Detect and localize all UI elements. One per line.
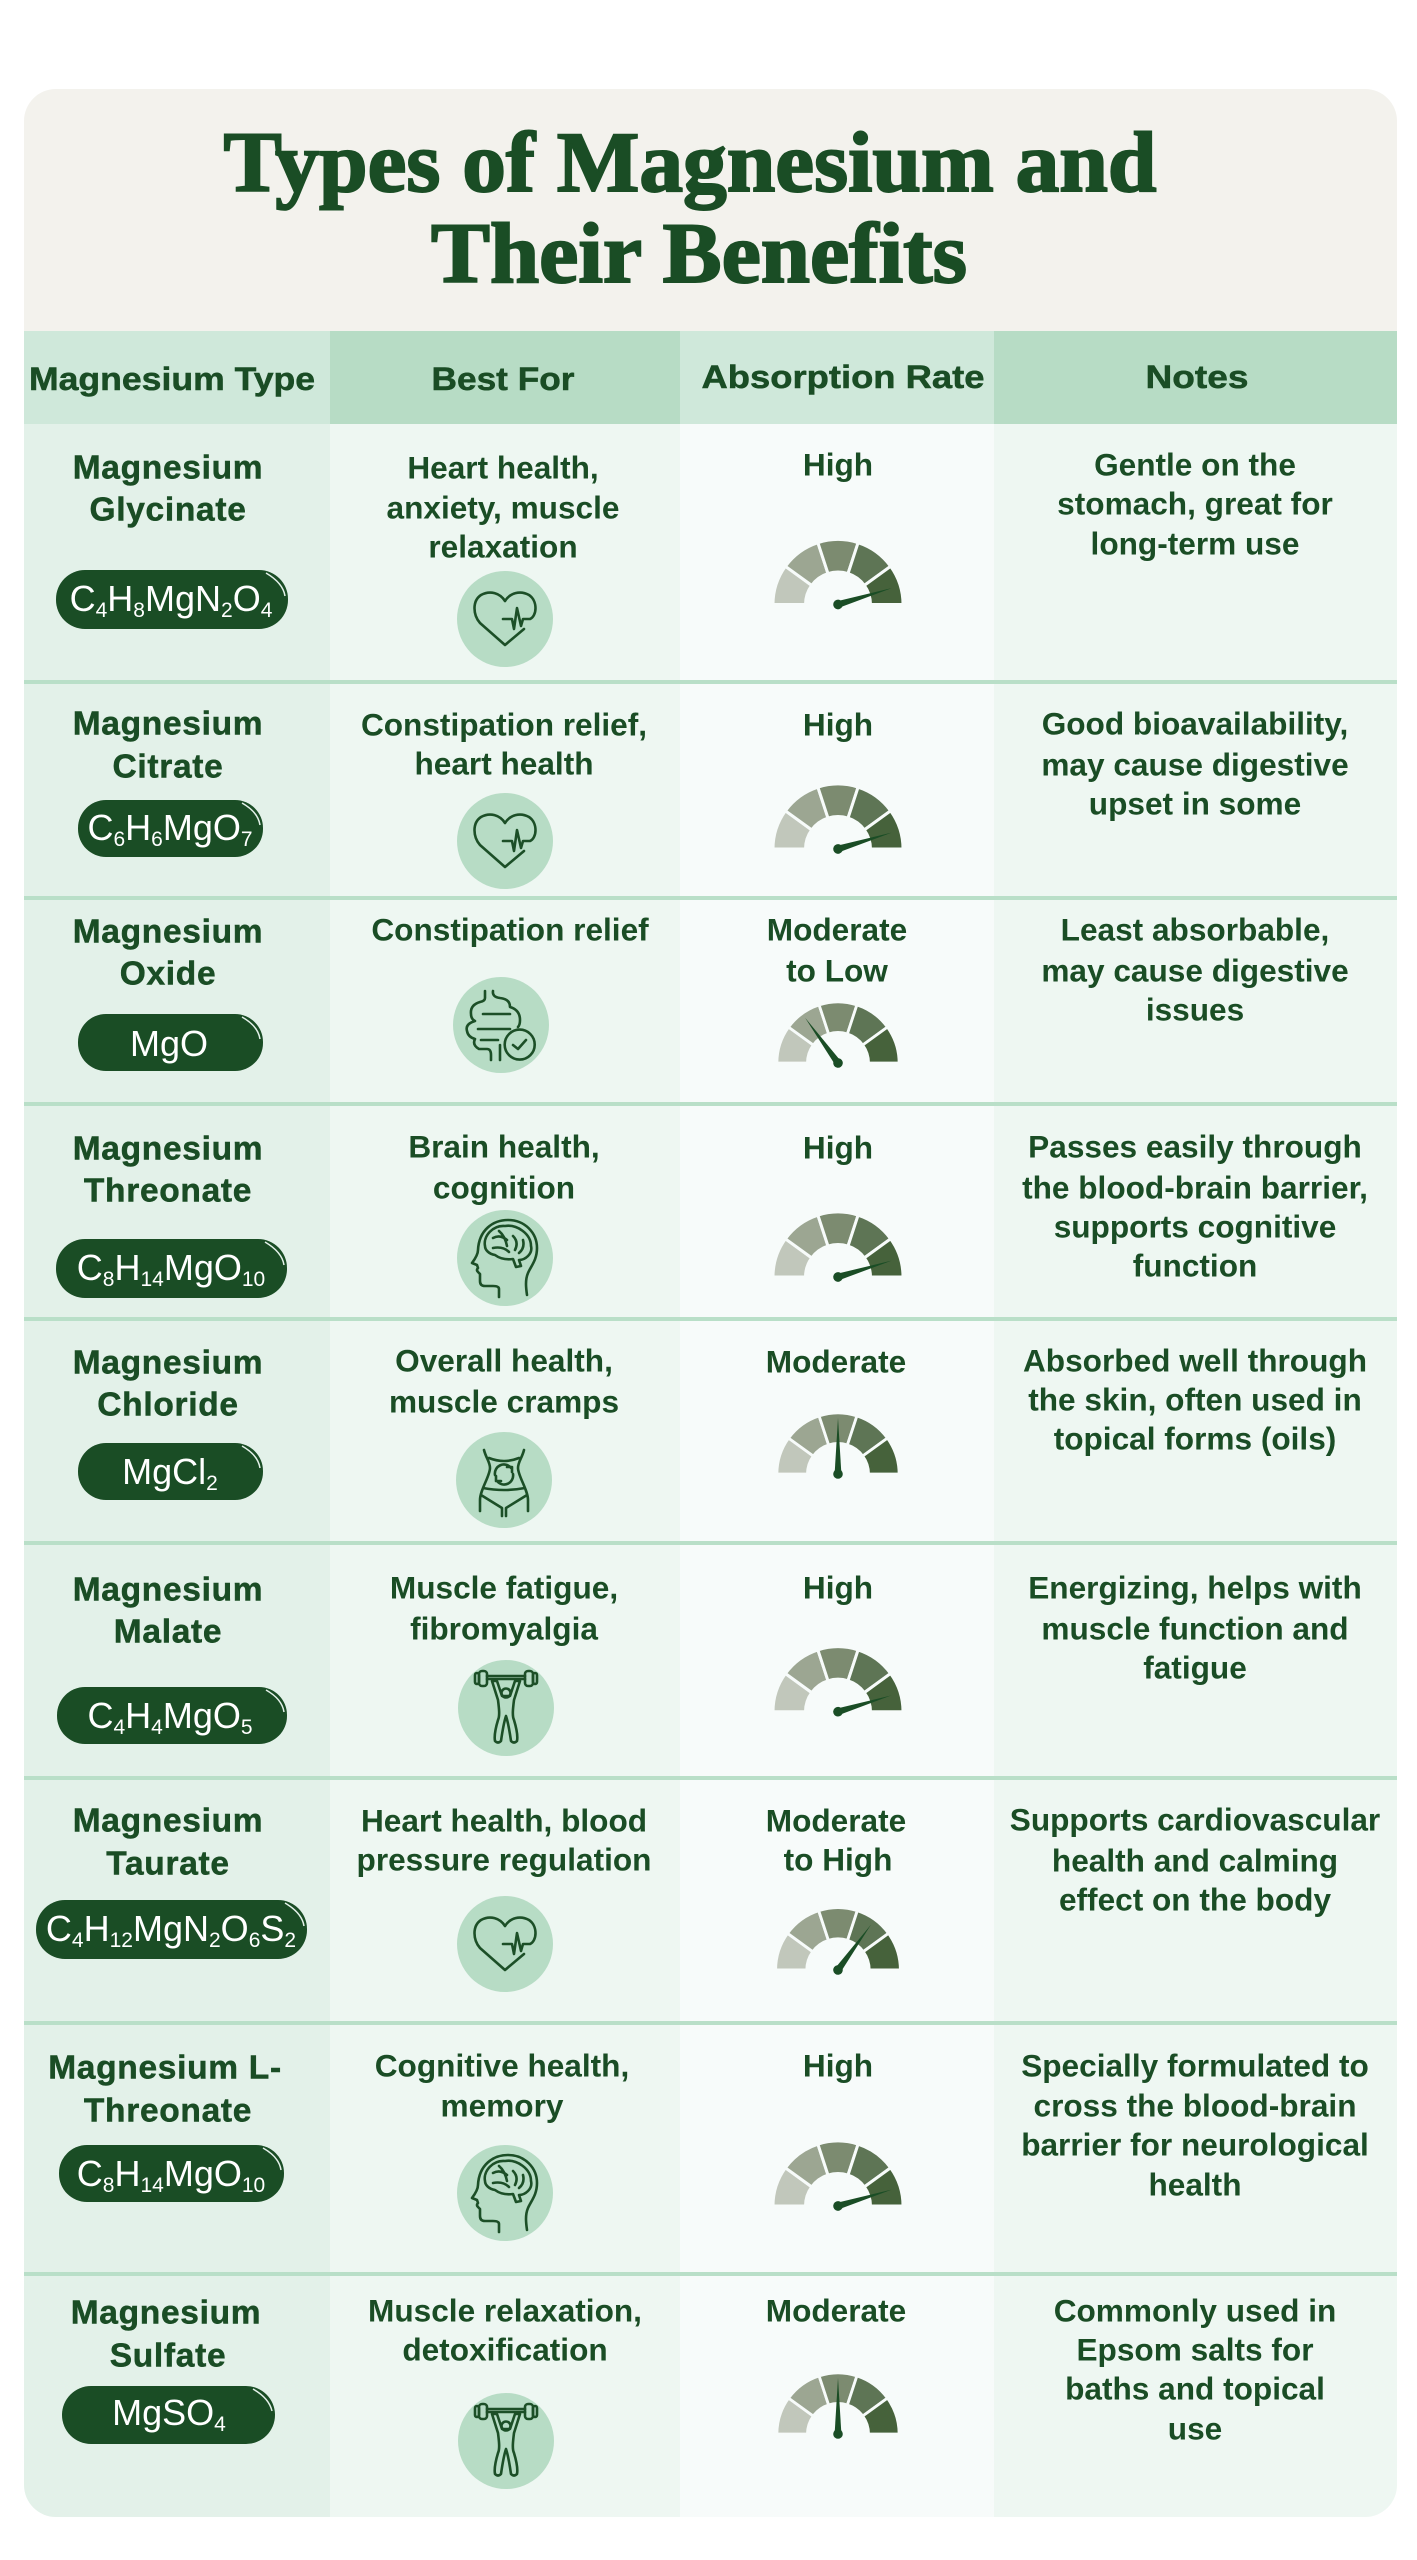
header: Absorption Rate: Absorption Rate	[702, 359, 984, 395]
absorption rate: Moderate	[766, 2292, 906, 2328]
formula pill: MgO	[164, 1247, 242, 1288]
type name: Magnesium L-	[48, 2050, 282, 2086]
icon: intestines	[453, 977, 549, 1073]
formula pill: 2	[221, 599, 233, 622]
notes: Supports cardiovascular	[1010, 1802, 1380, 1838]
formula pill: MgO	[164, 2153, 242, 2194]
formula pill: 4	[72, 1929, 84, 1952]
notes: stomach, great for	[1057, 486, 1333, 522]
formula pill: 8	[103, 1268, 114, 1291]
absorption rate: Moderate	[766, 1344, 906, 1380]
formula pill: 14	[140, 1268, 164, 1291]
formula pill: 14	[140, 2174, 164, 2197]
title: Their Benefits	[431, 205, 967, 301]
icon: brain in head	[457, 2145, 553, 2241]
row: Magnesium Malate	[57, 1570, 1362, 1756]
gauge: moderate to low	[777, 1002, 899, 1070]
notes: the skin, often used in	[1028, 1382, 1362, 1418]
formula pill: MgO	[130, 1023, 208, 1064]
type name: Magnesium	[73, 706, 263, 742]
formula pill: 2	[206, 1472, 218, 1495]
formula pill: 2	[209, 1929, 221, 1952]
formula pill: MgN	[133, 1908, 209, 1949]
title: Types of Magnesium and	[224, 114, 1156, 210]
type name: Malate	[114, 1614, 222, 1650]
best for: Overall health,	[395, 1342, 613, 1378]
formula pill	[78, 1014, 263, 1071]
best for: cognition	[433, 1170, 575, 1206]
notes: supports cognitive	[1054, 1208, 1336, 1244]
row: Magnesium Glycinate	[56, 446, 1333, 667]
notes: upset in some	[1089, 786, 1301, 822]
formula pill: C	[70, 578, 96, 619]
absorption rate: High	[803, 2048, 873, 2084]
formula pill: H	[114, 1247, 140, 1288]
best for: Constipation relief,	[361, 706, 647, 742]
notes: Passes easily through	[1028, 1128, 1362, 1164]
notes: topical forms (oils)	[1054, 1420, 1336, 1456]
notes: Commonly used in	[1054, 2292, 1336, 2328]
notes: Specially formulated to	[1021, 2048, 1369, 2084]
formula pill	[56, 1239, 287, 1298]
formula pill: O	[233, 578, 261, 619]
formula pill: 4	[113, 1716, 125, 1739]
formula pill: 2	[284, 1929, 296, 1952]
formula pill: O	[221, 1908, 249, 1949]
formula pill: H	[114, 2153, 140, 2194]
notes: the blood-brain barrier,	[1022, 1170, 1368, 1206]
best for: Cognitive health,	[375, 2048, 629, 2084]
formula pill: 4	[261, 599, 273, 622]
absorption rate: to High	[784, 1842, 892, 1878]
gauge: high	[773, 1212, 903, 1283]
header: Best For: Best For	[432, 361, 574, 397]
type name: Magnesium	[73, 914, 263, 950]
row: Magnesium Oxide	[73, 912, 1349, 1073]
type name: Magnesium	[71, 2294, 261, 2332]
notes: barrier for neurological	[1021, 2126, 1369, 2162]
type name: Glycinate	[89, 492, 247, 528]
formula pill	[56, 570, 288, 629]
notes: Good bioavailability,	[1042, 706, 1348, 742]
formula pill: C	[87, 1695, 113, 1736]
formula pill: 4	[96, 599, 108, 622]
icon: brain in head	[457, 1210, 553, 1306]
type name: Taurate	[106, 1846, 230, 1882]
formula pill: 8	[103, 2174, 114, 2197]
type name: Magnesium	[73, 1130, 263, 1168]
row: Magnesium L-Threonate	[48, 2048, 1369, 2241]
gauge: high	[773, 784, 903, 855]
icon: heart	[457, 1896, 553, 1992]
best for: muscle cramps	[389, 1384, 619, 1420]
notes: baths and topical	[1065, 2370, 1325, 2406]
type name: Sulfate	[110, 2338, 226, 2374]
formula pill: C	[87, 807, 113, 848]
formula pill: 6	[151, 828, 163, 851]
formula pill: 7	[241, 828, 253, 851]
best for: Constipation relief	[371, 912, 649, 948]
icon: weightlifter	[458, 2393, 554, 2489]
type name: Chloride	[97, 1386, 239, 1424]
notes: use	[1168, 2410, 1222, 2446]
formula pill: C	[46, 1908, 72, 1949]
formula pill	[36, 1900, 307, 1959]
absorption rate: High	[803, 1130, 873, 1166]
icon: waist	[456, 1432, 552, 1528]
gauge: moderate	[777, 2373, 899, 2439]
absorption rate: High	[803, 446, 873, 482]
notes: may cause digestive	[1041, 952, 1349, 988]
type name: Magnesium	[73, 1802, 263, 1840]
absorption rate: High	[803, 706, 873, 742]
row: Magnesium Citrate	[73, 706, 1349, 889]
formula pill: 4	[151, 1716, 163, 1739]
formula pill: 10	[242, 2174, 265, 2197]
notes: Gentle on the	[1094, 446, 1296, 482]
best for: relaxation	[428, 528, 578, 564]
formula pill: H	[125, 1695, 151, 1736]
formula pill	[59, 2145, 284, 2202]
absorption rate: High	[803, 1570, 873, 1606]
header: Notes: Notes	[1146, 359, 1248, 395]
formula pill: 6	[113, 828, 125, 851]
notes: effect on the body	[1059, 1882, 1331, 1918]
type name: Citrate	[112, 748, 224, 786]
formula pill	[62, 2386, 275, 2444]
notes: Epsom salts for	[1076, 2332, 1314, 2368]
gauge: moderate to high	[776, 1908, 900, 1977]
best for: heart health	[414, 746, 594, 782]
formula pill: 8	[133, 599, 145, 622]
best for: Muscle fatigue,	[390, 1570, 618, 1606]
notes: Energizing, helps with	[1028, 1570, 1362, 1606]
icon: weightlifter	[458, 1660, 554, 1756]
notes: health and calming	[1052, 1842, 1338, 1878]
best for: Brain health,	[408, 1128, 600, 1164]
best for: fibromyalgia	[410, 1610, 598, 1646]
table header row	[29, 359, 1248, 397]
gauge: moderate	[777, 1413, 899, 1479]
formula pill: H	[107, 578, 133, 619]
notes: issues	[1146, 992, 1244, 1028]
icon: heart	[457, 571, 553, 667]
formula pill: MgN	[145, 578, 221, 619]
formula pill	[78, 1443, 263, 1500]
formula pill: C	[77, 2153, 103, 2194]
gauge: high	[773, 1647, 903, 1718]
best for: anxiety, muscle	[387, 490, 619, 526]
absorption rate: to Low	[786, 952, 888, 988]
formula pill: MgCl	[122, 1451, 206, 1492]
absorption rate: Moderate	[766, 1802, 906, 1838]
formula pill: MgO	[163, 807, 241, 848]
best for: Muscle relaxation,	[368, 2292, 642, 2328]
best for: memory	[441, 2088, 564, 2124]
type name: Oxide	[120, 956, 216, 992]
header: Magnesium Type: Magnesium Type	[29, 361, 315, 397]
type name: Threonate	[84, 1172, 252, 1210]
notes: may cause digestive	[1041, 746, 1349, 782]
type name: Threonate	[84, 2092, 252, 2130]
notes: health	[1148, 2166, 1242, 2202]
best for: detoxification	[402, 2332, 608, 2368]
formula pill: MgSO	[112, 2392, 214, 2433]
formula pill	[57, 1687, 287, 1744]
notes: muscle function and	[1041, 1610, 1349, 1646]
formula pill: H	[84, 1908, 110, 1949]
formula pill	[78, 800, 263, 857]
notes: Least absorbable,	[1061, 912, 1329, 948]
notes: function	[1133, 1248, 1257, 1284]
formula pill: 10	[242, 1268, 265, 1291]
type name: Magnesium	[73, 1344, 263, 1382]
row: Magnesium Chloride	[73, 1342, 1367, 1528]
formula pill: S	[260, 1908, 284, 1949]
icon: heart	[457, 793, 553, 889]
best for: Heart health,	[407, 450, 599, 486]
type name: Magnesium	[73, 1572, 263, 1608]
formula pill: C	[77, 1247, 103, 1288]
notes: cross the blood-brain	[1034, 2088, 1356, 2124]
notes: fatigue	[1143, 1650, 1247, 1686]
formula pill: H	[125, 807, 151, 848]
formula pill: 12	[110, 1929, 133, 1952]
row: Magnesium Taurate	[36, 1802, 1380, 1992]
formula pill: MgO	[163, 1695, 241, 1736]
gauge: high	[773, 540, 903, 610]
notes: long-term use	[1091, 526, 1299, 562]
row: Magnesium Threonate	[56, 1128, 1368, 1306]
absorption rate: Moderate	[767, 912, 907, 948]
row: Magnesium Sulfate	[62, 2292, 1336, 2489]
formula pill: 4	[214, 2413, 226, 2436]
formula pill: 6	[249, 1929, 260, 1952]
gauge: high	[773, 2141, 903, 2212]
notes: Absorbed well through	[1023, 1342, 1367, 1378]
formula pill: 5	[241, 1716, 253, 1739]
best for: pressure regulation	[357, 1842, 651, 1878]
best for: Heart health, blood	[361, 1802, 647, 1838]
type name: Magnesium	[73, 450, 263, 486]
